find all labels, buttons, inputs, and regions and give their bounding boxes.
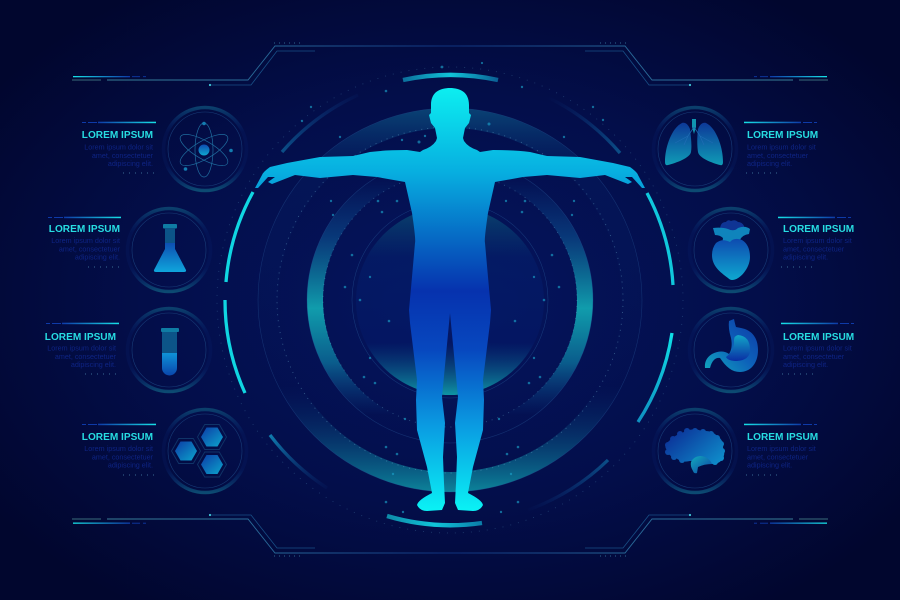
text block: lungs: Lorem ipsum dolor sit [747,142,816,152]
text block: test tube [45,323,119,374]
text block: hexagons: Lorem ipsum dolor sit [84,444,153,453]
human body silhouette [255,88,645,511]
text block: atom: amet, consectetuer [92,151,154,160]
text block: heart: amet, consectetuer [783,244,845,253]
text block: brain: Lorem ipsum dolor sit [747,444,816,453]
text block: flask [48,217,121,267]
text block: atom [82,122,156,173]
text block: flask: amet, consectetuer [59,244,121,253]
text block: flask: LOREM IPSUM [49,224,120,235]
central concentric rings [217,67,683,533]
text block: heart: adipiscing elit. [783,252,828,262]
text block: flask: adipiscing elit. [75,252,120,262]
text block: hexagons: LOREM IPSUM [82,432,153,443]
text block: atom: adipiscing elit. [108,159,153,168]
text block: test tube: adipiscing elit. [71,360,116,369]
text block: hexagons: amet, consectetuer [92,452,154,461]
text block: stomach: amet, consectetuer [783,352,845,361]
text block: lungs [744,122,818,173]
text block: brain: adipiscing elit. [747,460,792,470]
panel: lungs [654,108,736,190]
icon: lungs [665,119,723,165]
panel: test tube [128,308,210,392]
top left frame lines [72,43,450,86]
panel: heart [690,208,772,292]
panel: atom [164,108,246,190]
panel: flask [128,208,210,292]
text block: stomach: Lorem ipsum dolor sit [783,344,852,353]
text block: stomach: adipiscing elit. [783,360,828,369]
text block: stomach: LOREM IPSUM [783,332,854,343]
icon: stomach [705,319,758,372]
icon: hexagons [172,424,226,477]
star particles [301,62,604,513]
panel: stomach [690,308,772,392]
text block: lungs: adipiscing elit. [747,159,792,168]
outer segmented arcs [225,75,673,525]
text block: atom: Lorem ipsum dolor sit [84,142,153,152]
bottom right frame lines [450,514,828,556]
panel: brain [654,410,736,492]
panel: hexagons [164,410,246,492]
text block: test tube: LOREM IPSUM [45,332,116,343]
text block: lungs: LOREM IPSUM [747,130,818,141]
icon: flask [154,224,186,272]
icon: test tube [161,328,179,376]
icon: brain [665,428,725,473]
text block: heart: Lorem ipsum dolor sit [783,236,852,245]
text block: hexagons: adipiscing elit. [108,460,153,470]
text block: lungs: amet, consectetuer [747,151,809,160]
icon: heart [712,220,750,280]
text block: brain [744,424,818,475]
text block: test tube: amet, consectetuer [55,352,117,361]
icon: atom [176,122,233,177]
text block: flask: Lorem ipsum dolor sit [51,236,120,245]
text block: atom: LOREM IPSUM [82,130,153,141]
text block: heart [778,217,854,267]
bottom left frame lines [72,514,450,556]
text block: hexagons [82,424,156,475]
text block: heart: LOREM IPSUM [783,224,854,235]
text block: brain: amet, consectetuer [747,452,809,461]
text block: stomach [781,323,854,374]
top right frame lines [450,43,828,86]
text block: test tube: Lorem ipsum dolor sit [47,344,116,353]
text block: brain: LOREM IPSUM [747,432,818,443]
